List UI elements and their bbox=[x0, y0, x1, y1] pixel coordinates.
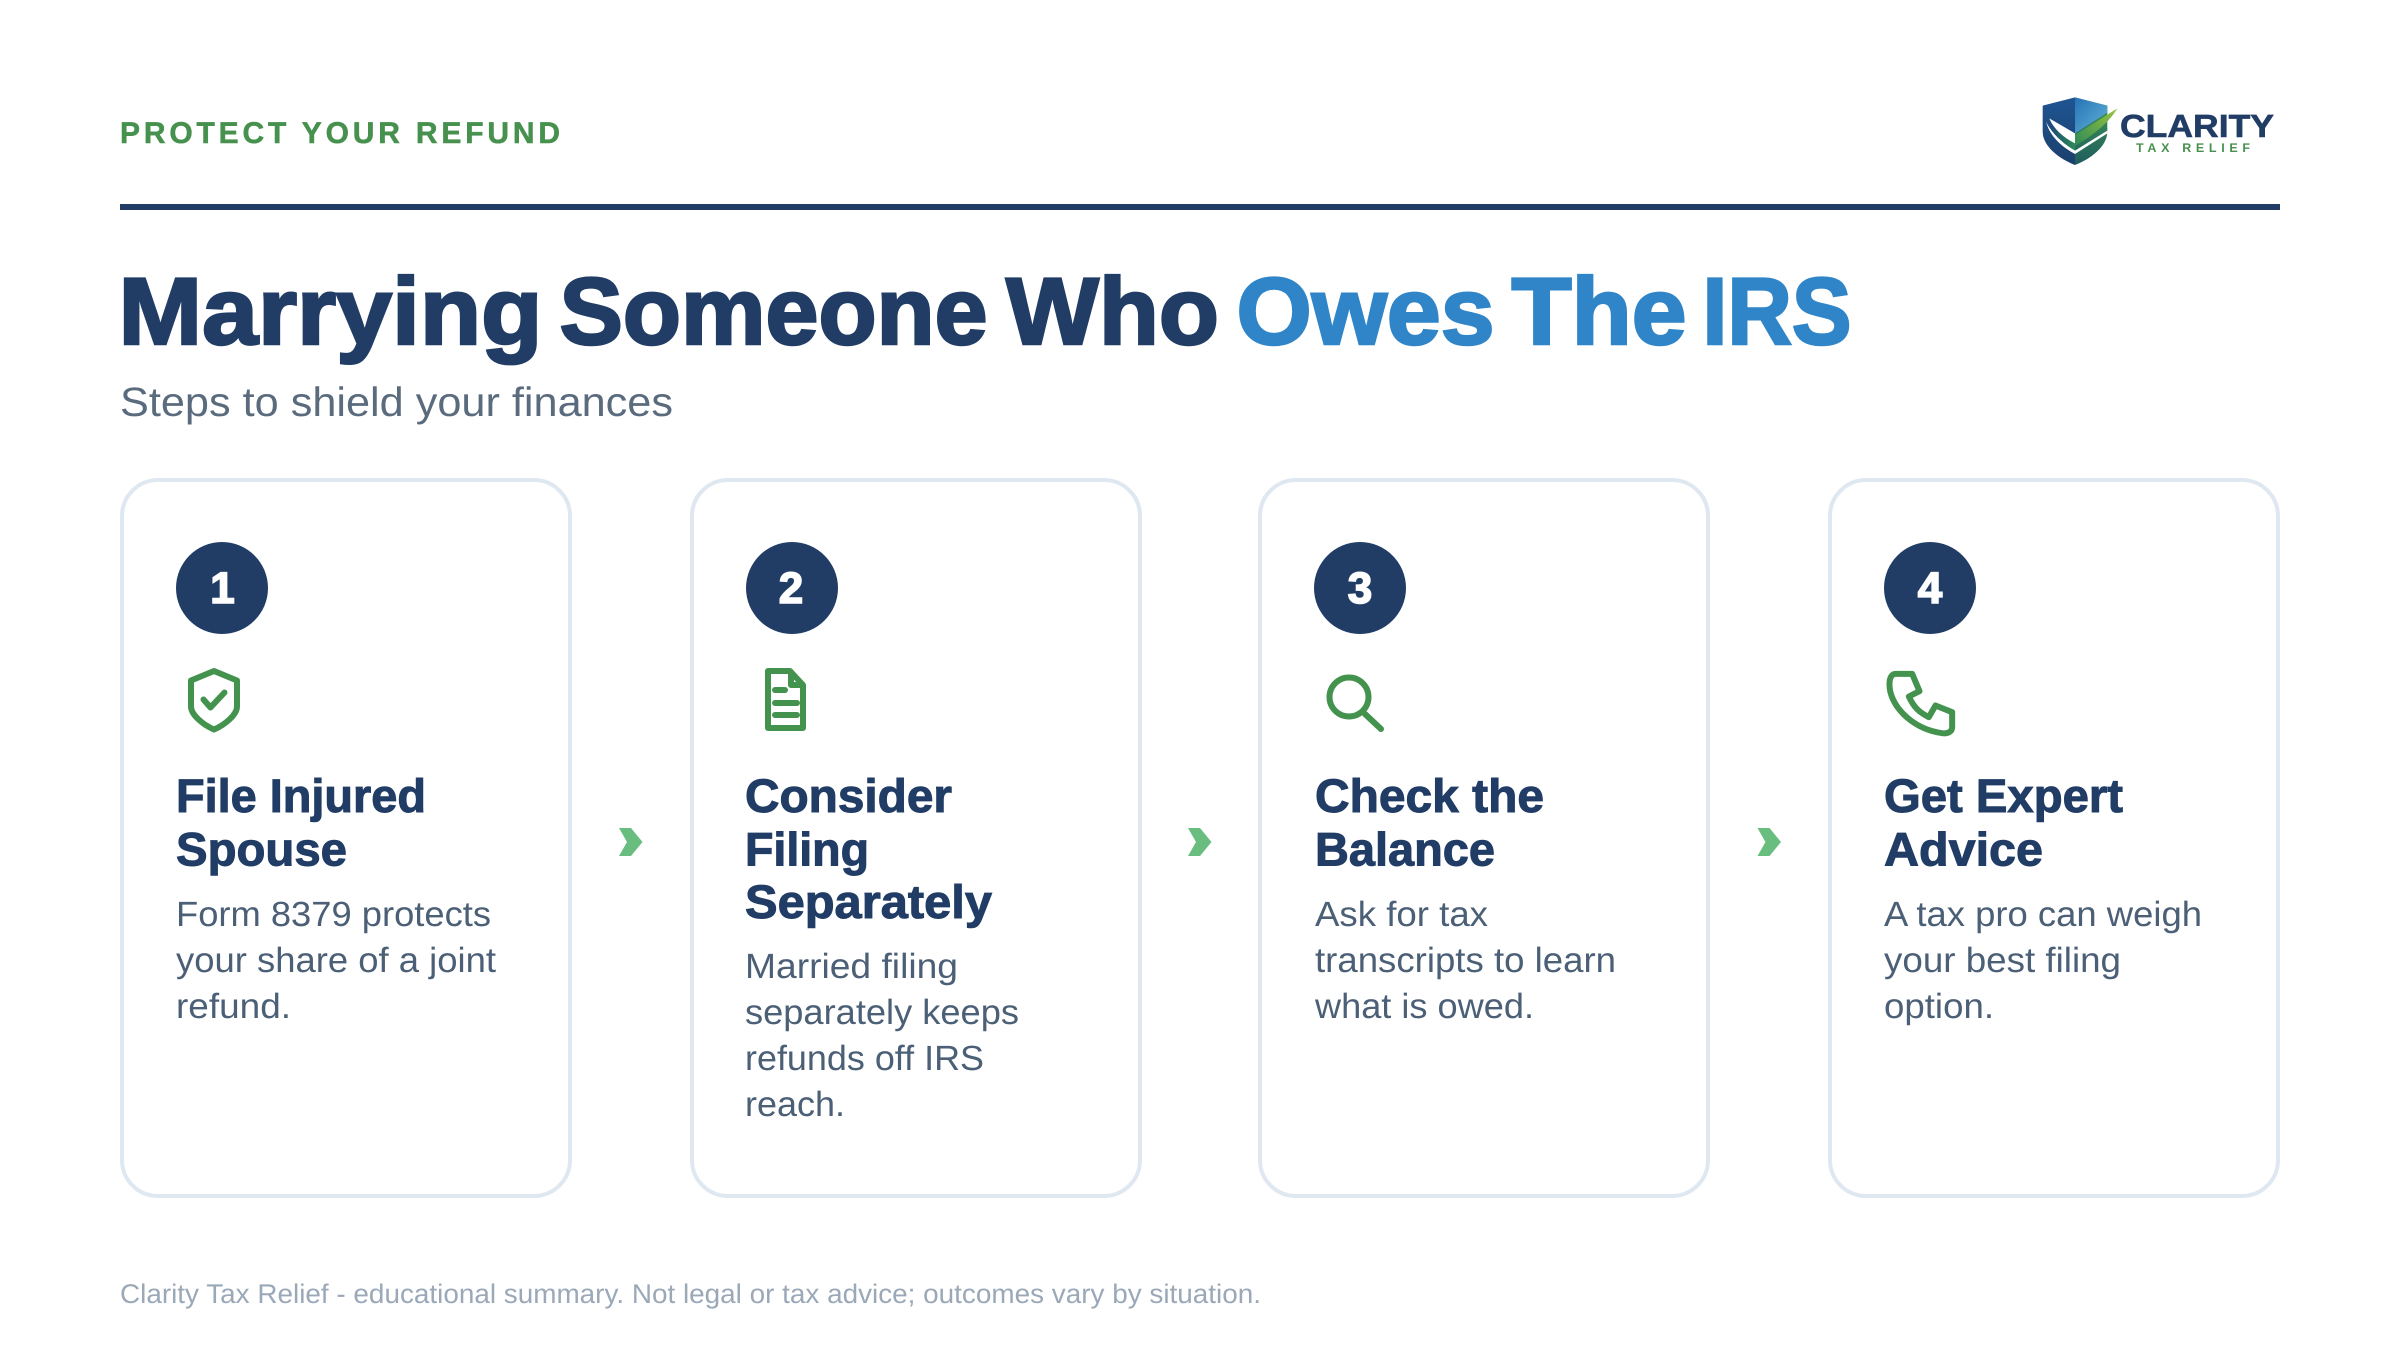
title: Who bbox=[1006, 259, 1219, 365]
icon: document bbox=[768, 671, 803, 728]
step number 4 bbox=[1884, 542, 1976, 634]
heading: File Injured bbox=[176, 769, 426, 822]
description: reach. bbox=[745, 1085, 845, 1124]
footer note: Clarity Tax Relief - educational summary. Not legal or tax advice; outcomes vary by situation. bbox=[120, 1279, 1261, 1309]
arrow 1 bbox=[619, 828, 642, 856]
description: your share of a joint bbox=[176, 941, 496, 980]
heading: Spouse bbox=[176, 822, 347, 876]
heading bbox=[1884, 769, 2123, 876]
title: The bbox=[1512, 259, 1686, 365]
heading: Get Expert bbox=[1884, 769, 2123, 822]
description: what is owed. bbox=[1314, 987, 1534, 1026]
description: Ask for tax bbox=[1315, 895, 1489, 934]
title bbox=[118, 259, 1852, 365]
description: separately keeps bbox=[745, 993, 1019, 1032]
description bbox=[1884, 895, 2202, 1026]
title: Someone bbox=[560, 259, 988, 365]
subtitle: Steps to shield your finances bbox=[120, 379, 673, 425]
heading: Filing bbox=[745, 822, 869, 876]
description bbox=[1314, 895, 1616, 1026]
panel: step 2 bbox=[692, 480, 1140, 1196]
heading bbox=[1315, 769, 1544, 876]
description: your best filing bbox=[1884, 941, 2121, 980]
heading: Separately bbox=[745, 875, 992, 928]
description bbox=[745, 947, 1019, 1124]
description: Married filing bbox=[745, 947, 958, 986]
panel: step 3 bbox=[1260, 480, 1708, 1196]
logo: Clarity Tax Relief bbox=[2043, 97, 2274, 165]
title: Marrying bbox=[118, 259, 542, 365]
step number 4: 4 bbox=[1918, 564, 1943, 613]
icon: logo shield bbox=[2043, 97, 2117, 165]
step number 3: 3 bbox=[1348, 564, 1372, 613]
description: A tax pro can weigh bbox=[1884, 895, 2202, 934]
heading: Balance bbox=[1315, 822, 1495, 876]
heading: Check the bbox=[1315, 769, 1544, 822]
panel: step 4 bbox=[1830, 480, 2278, 1196]
icon: phone bbox=[1889, 674, 1952, 733]
title: Owes bbox=[1236, 259, 1494, 365]
logo tagline: TAX RELIEF bbox=[2136, 141, 2250, 155]
heading bbox=[176, 769, 426, 876]
step number 1: 1 bbox=[210, 564, 235, 613]
description: Form 8379 protects bbox=[176, 895, 491, 934]
step number 2: 2 bbox=[779, 564, 803, 613]
step number 2 bbox=[746, 542, 838, 634]
description: option. bbox=[1884, 987, 1994, 1026]
description: refunds off IRS bbox=[745, 1039, 984, 1078]
logo wordmark: CLARITY bbox=[2120, 108, 2274, 144]
arrow 2 bbox=[1188, 828, 1212, 856]
panel: step 1 bbox=[122, 480, 570, 1196]
heading bbox=[745, 769, 992, 928]
arrow 3 bbox=[1758, 828, 1781, 856]
title: IRS bbox=[1702, 259, 1852, 365]
heading: Advice bbox=[1884, 822, 2043, 876]
step number 3 bbox=[1314, 542, 1406, 634]
icon: shield check bbox=[191, 671, 237, 730]
description bbox=[176, 895, 496, 1026]
description: refund. bbox=[176, 987, 291, 1026]
step number 1 bbox=[176, 542, 268, 634]
description: transcripts to learn bbox=[1315, 941, 1616, 980]
eyebrow label: PROTECT YOUR REFUND bbox=[120, 117, 560, 150]
icon: magnifier bbox=[1330, 678, 1381, 729]
heading: Consider bbox=[745, 769, 952, 822]
